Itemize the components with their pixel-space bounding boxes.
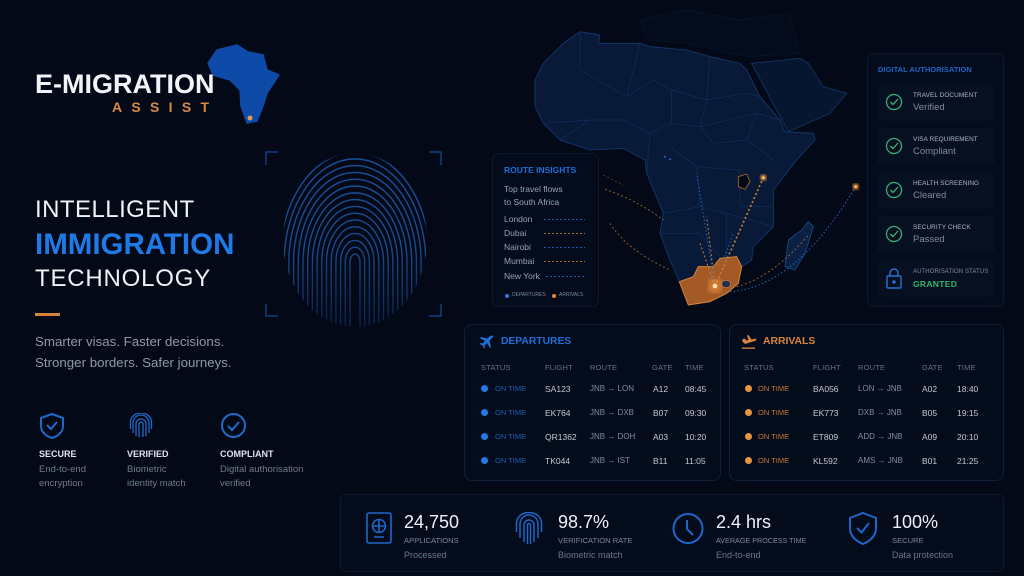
panel: departures: GATE [652,363,673,372]
arrival rows [745,384,978,466]
feature: verified: Biometric [127,464,167,475]
headline: TECHNOLOGY [35,265,211,292]
icon: fingerprint [130,413,152,437]
panel: arrivals: STATUS [744,363,774,372]
icon: fingerprint [516,512,542,544]
status: granted [877,260,995,297]
departure rows: B07 [653,408,668,418]
stat: secure: Data protection [892,550,953,560]
Lake Victoria [738,174,750,189]
map: Africa and Arabia route network [534,10,860,306]
panel: departures: ROUTE [590,363,617,372]
headline: INTELLIGENT [35,196,195,223]
status: granted: GRANTED [913,279,957,289]
route legend rows: Mumbai [504,256,534,266]
arrival rows: BA056 [813,384,839,394]
departure rows: ON TIME [495,456,526,465]
departure rows: ON TIME [495,384,526,393]
feature: compliant: verified [220,478,251,489]
feature: secure: encryption [39,478,83,489]
departure rows: SA123 [545,384,571,394]
route legend rows [504,214,585,281]
Arabian peninsula [752,58,847,132]
stat: process time: AVERAGE PROCESS TIME [716,536,806,545]
Europe and Middle East hint [640,10,800,57]
map key: ARRIVALS [559,292,583,298]
departure rows: 08:45 [685,384,706,394]
Madagascar [785,222,813,270]
feature: compliant: Digital authorisation [220,464,303,475]
panel: departures: STATUS [481,363,511,372]
arrival rows: ON TIME [758,408,789,417]
departure rows: ON TIME [495,432,526,441]
departure rows: 09:30 [685,408,706,418]
arrival rows: ON TIME [758,432,789,441]
check: health screening: HEALTH SCREENING [913,180,979,187]
panel: route insights [492,153,599,307]
departure rows [481,384,706,466]
arrival rows: DXB → JNB [858,408,902,417]
route legend rows: Nairobi [504,242,531,252]
departure rows: 10:20 [685,432,706,442]
headline [35,196,234,292]
arrival rows: ON TIME [758,456,789,465]
headline: IMMIGRATION [35,228,234,261]
stat: verification: Biometric match [558,550,623,560]
check: visa requirement [877,128,995,165]
stat: applications: APPLICATIONS [404,536,459,545]
icon: shield [40,412,64,439]
icon: clock [672,513,704,544]
panel: departures: DEPARTURES [501,336,571,347]
arrival routes [603,175,808,287]
stat: verification: VERIFICATION RATE [558,536,632,545]
route legend rows: New York [504,271,540,281]
arrival rows: B01 [922,456,937,466]
logo subtitle: ASSIST [112,99,218,115]
map base layers [535,10,856,305]
feature: secure: End-to-end [39,464,86,475]
route nodes [664,156,859,292]
arrival rows: 18:40 [957,384,978,394]
check: security: Passed [913,234,945,245]
icon: passport [366,512,392,544]
panel: route insights: to South Africa [504,197,559,207]
arrival rows: EK773 [813,408,839,418]
logo wordmark: E-MIGRATION [35,69,214,99]
stat: applications [366,512,459,560]
check: security [877,216,995,253]
panel: arrivals [729,324,1004,481]
departure rows: JNB → DXB [590,408,634,417]
feature: secure: SECURE [39,449,77,459]
stat: secure: 100% [892,512,938,532]
fingerprint scan [265,151,442,327]
arrival rows: AMS → JNB [858,456,903,465]
country borders [543,32,780,260]
panel: statistics bar [340,494,1004,572]
check: health screening: Cleared [913,190,946,201]
scan brackets [266,152,441,316]
panel: arrivals: GATE [922,363,943,372]
departure routes [697,173,856,292]
arrival rows: 21:25 [957,456,978,466]
panel: departures: FLIGHT [545,363,573,372]
panel: arrivals: ROUTE [858,363,885,372]
panel: arrivals: FLIGHT [813,363,841,372]
panel: digital authorisation: DIGITAL AUTHORISATION [878,65,972,74]
panel: arrivals: ARRIVALS [763,336,815,347]
status: granted: AUTHORISATION STATUS [913,269,988,275]
arrival rows: ADD → JNB [858,432,902,441]
check: visa requirement: Compliant [913,146,956,157]
feature: verified: identity match [127,478,186,489]
stat: applications: 24,750 [404,512,459,532]
check: health screening [877,172,995,209]
departure rows: QR1362 [545,432,577,442]
arrival rows: KL592 [813,456,838,466]
departure rows: 11:05 [685,456,706,466]
stat: secure [849,512,953,560]
stat: process time [672,512,806,560]
map key [505,292,584,298]
arrival rows: B05 [922,408,937,418]
departure rows: ON TIME [495,408,526,417]
fingerprint ridges [280,152,430,335]
route legend rows: London [504,214,532,224]
logo: Africa silhouette [207,44,280,124]
stat: verification [516,512,632,560]
feature: verified [127,413,186,489]
departure rows: A03 [653,432,668,442]
stat: process time: 2.4 hrs [716,512,771,532]
icon: plane departing [480,336,494,348]
feature: compliant [220,413,303,489]
stat: verification: 98.7% [558,512,609,532]
map key: DEPARTURES [512,292,546,298]
Africa landmass [535,32,815,305]
arrival rows: 19:15 [957,408,978,418]
tagline: Stronger borders. Safer journeys. [35,355,232,370]
departure rows: B11 [653,456,668,466]
arrival rows: LON → JNB [858,384,902,393]
check: travel document: TRAVEL DOCUMENT [913,92,977,99]
tagline [35,334,232,370]
logo [35,44,280,124]
check: travel document [877,84,995,121]
panel: departures: TIME [685,363,704,372]
South Africa highlight [679,257,742,305]
panel: arrivals: TIME [957,363,976,372]
panel: departures [464,324,721,481]
departure rows: A12 [653,384,668,394]
orange accent line [35,313,60,316]
feature: compliant: COMPLIANT [220,449,274,459]
stat: secure: SECURE [892,536,924,545]
panel: digital authorisation [867,53,1004,307]
panel: route insights: Top travel flows [504,184,563,194]
stat: process time: End-to-end [716,550,761,560]
panel: route insights: ROUTE INSIGHTS [504,165,576,175]
departure rows: JNB → LON [590,384,634,393]
feature: verified: VERIFIED [127,449,169,459]
departure rows: JNB → DOH [590,432,635,441]
departure rows: JNB → IST [590,456,630,465]
icon: shield [849,512,877,546]
icon: plane arriving [742,335,756,349]
check: security: SECURITY CHECK [913,224,971,231]
arrival rows: A09 [922,432,937,442]
arrival rows: ET809 [813,432,838,442]
feature: secure [39,412,86,489]
icon: check circle [221,413,246,438]
arrival rows: ON TIME [758,384,789,393]
arrival rows: 20:10 [957,432,978,442]
check: visa requirement: VISA REQUIREMENT [913,136,978,143]
route legend rows: Dubai [504,228,526,238]
stat: applications: Processed [404,550,447,560]
Lesotho [721,280,731,288]
tagline: Smarter visas. Faster decisions. [35,334,224,349]
check: travel document: Verified [913,102,945,113]
arrival rows: A02 [922,384,937,394]
departure rows: TK044 [545,456,570,466]
departure rows: EK764 [545,408,571,418]
